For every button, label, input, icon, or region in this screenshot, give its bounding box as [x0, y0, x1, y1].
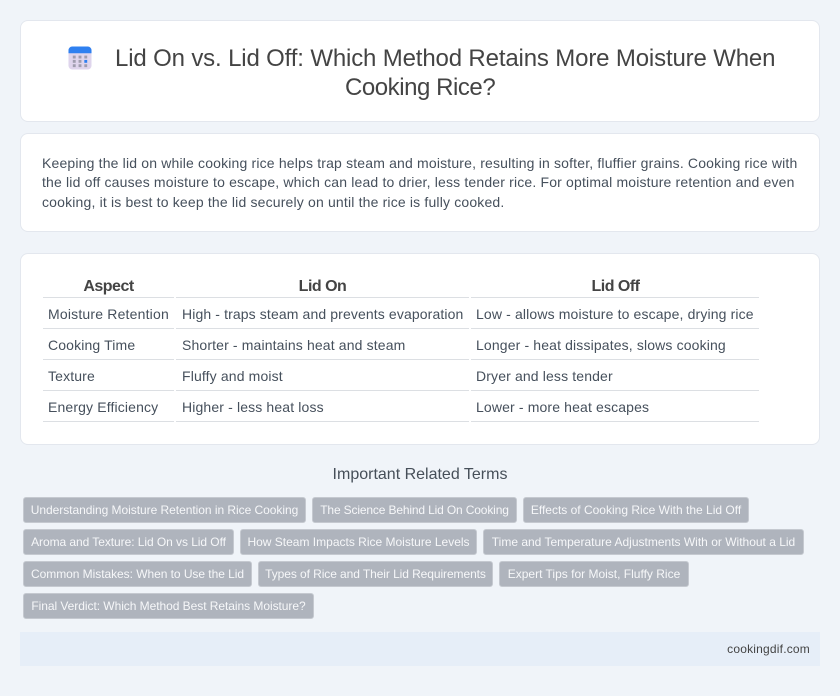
row: texture: Texture [48, 368, 95, 384]
related term tags: Effects of Cooking Rice With the Lid Off [531, 503, 741, 517]
intro text [42, 154, 797, 210]
title [115, 45, 775, 101]
row: cooking time: Shorter - maintains heat and steam [182, 337, 405, 353]
icon: calendar [68, 46, 92, 70]
related term tags: Aroma and Texture: Lid On vs Lid Off [31, 535, 226, 549]
intro text: cooking, it is best to keep the lid securely on until the rice is fully cooked. [42, 194, 504, 210]
row: energy efficiency: Higher - less heat loss [182, 399, 324, 415]
panel: introduction [20, 133, 820, 232]
table header: Lid Off [591, 278, 640, 295]
row: cooking time [48, 337, 726, 353]
related term tags: Types of Rice and Their Lid Requirements [265, 567, 486, 581]
related term tags [23, 497, 804, 619]
table header: Lid On [299, 278, 346, 295]
table header: Aspect [83, 278, 134, 295]
related term tags: Common Mistakes: When to Use the Lid [31, 567, 244, 581]
row: moisture retention: High - traps steam and prevents evaporation [182, 306, 463, 322]
row: energy efficiency: Energy Efficiency [48, 399, 158, 415]
intro text: Keeping the lid on while cooking rice helps trap steam and moisture, resulting in softer, fluffier grains. Cooking rice with [42, 154, 797, 170]
intro text: the lid off causes moisture to escape, which can lead to drier, less tender rice. For optimal moisture retention and even [42, 174, 795, 190]
footer bar [20, 632, 820, 666]
heading: important related terms: Important Related Terms [333, 466, 507, 483]
row: energy efficiency: Lower - more heat escapes [476, 399, 649, 415]
title: Lid On vs. Lid Off: Which Method Retains More Moisture When [115, 45, 775, 72]
row: energy efficiency [48, 399, 649, 415]
row: cooking time: Longer - heat dissipates, slows cooking [476, 337, 726, 353]
related term tags: The Science Behind Lid On Cooking [320, 503, 509, 517]
related term tags: Expert Tips for Moist, Fluffy Rice [508, 567, 680, 581]
row: texture: Fluffy and moist [182, 368, 283, 384]
related term tags: Understanding Moisture Retention in Rice Cooking [31, 503, 298, 517]
row: texture: Dryer and less tender [476, 368, 613, 384]
panel: title header [20, 20, 820, 122]
related term tags: Final Verdict: Which Method Best Retains Moisture? [31, 599, 306, 613]
related term tags: Time and Temperature Adjustments With or Without a Lid [492, 535, 795, 549]
footer source: cookingdif.com [727, 642, 810, 656]
row: moisture retention: Low - allows moisture to escape, drying rice [476, 306, 754, 322]
related term tags: How Steam Impacts Rice Moisture Levels [247, 535, 470, 549]
table header [83, 278, 640, 295]
row: moisture retention [48, 306, 754, 322]
title: Cooking Rice? [345, 74, 495, 101]
row: moisture retention: Moisture Retention [48, 306, 169, 322]
row: cooking time: Cooking Time [48, 337, 135, 353]
row: texture [48, 368, 613, 384]
panel: comparison table [20, 253, 820, 445]
